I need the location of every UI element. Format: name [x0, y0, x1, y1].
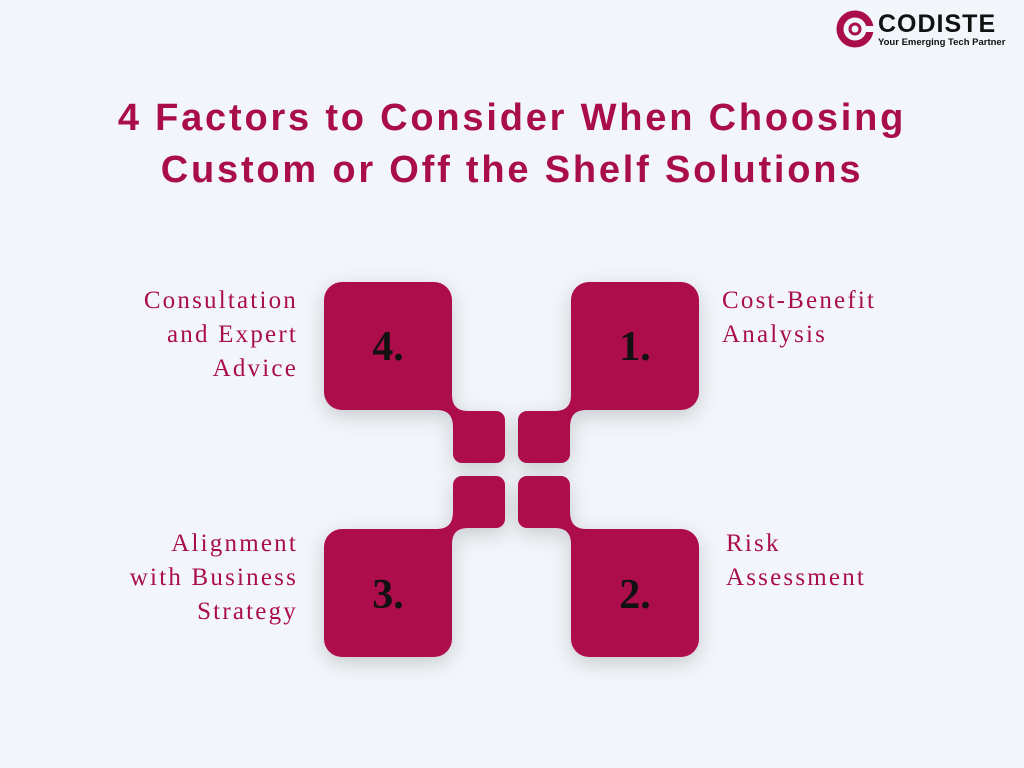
label 3: Strategy — [197, 598, 298, 625]
label 3: Alignment — [171, 530, 298, 557]
label 4: Consultation — [144, 287, 298, 314]
label 2: Assessment — [726, 564, 866, 591]
label 1 — [722, 287, 876, 348]
diagram: 4. — [372, 324, 404, 370]
label 3 — [130, 530, 298, 625]
diagram: 2. — [619, 572, 651, 618]
label 4: Advice — [213, 355, 298, 382]
title: Custom or Off the Shelf Solutions — [161, 149, 863, 191]
logo: CODISTE — [878, 10, 996, 38]
label 1: Analysis — [722, 321, 827, 348]
label 4 — [144, 287, 298, 382]
label 2: Risk — [726, 530, 781, 557]
label 1: Cost-Benefit — [722, 287, 876, 314]
title: 4 Factors to Consider When Choosing — [118, 97, 906, 139]
logo: Your Emerging Tech Partner — [878, 37, 1005, 48]
label 3: with Business — [130, 564, 298, 591]
diagram: 1. — [619, 324, 651, 370]
diagram: 3. — [372, 572, 404, 618]
label 2 — [726, 530, 866, 591]
title — [118, 97, 906, 191]
logo — [836, 10, 1006, 48]
label 4: and Expert — [167, 321, 298, 348]
